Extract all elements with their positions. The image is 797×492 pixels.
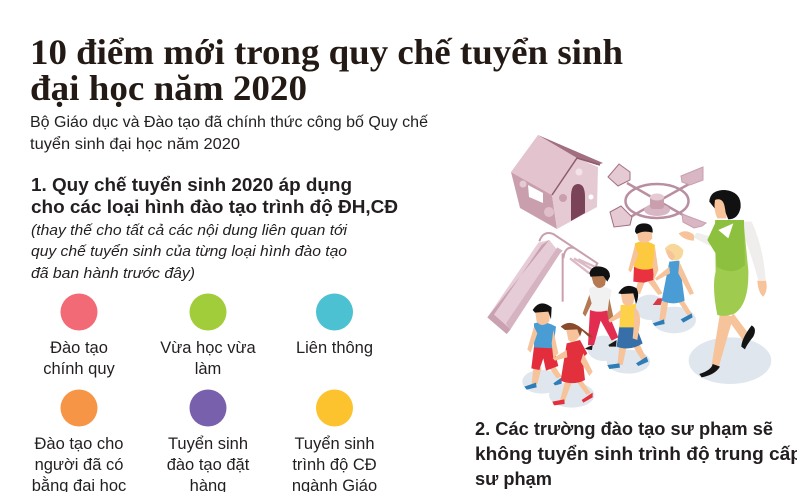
icon: carousel: [608, 164, 706, 228]
heading: point 2: không tuyển sinh trình độ trung cấp: [475, 444, 797, 464]
item: Tuyển sinh đào tạo đặt hàng: Tuyển sinh: [168, 435, 248, 453]
item: Đào tạo cho người đã có bằng đại học: Đào tạo cho: [35, 435, 123, 453]
illustration: child in yellow shirt, blue shorts: [607, 286, 650, 374]
item: Vừa học vừa làm: [160, 294, 257, 378]
item: Đào tạo cho người đã có bằng đại học: người đã có: [35, 456, 123, 474]
item: Vừa học vừa làm: Vừa học vừa: [160, 339, 257, 357]
heading: point 1: [31, 175, 398, 217]
title: [30, 32, 623, 108]
item: Liên thông: [296, 294, 373, 357]
item: Tuyển sinh trình độ CĐ ngành Giáo: trình độ CĐ: [292, 456, 377, 474]
illustration: child in white shirt, red trousers: [583, 266, 619, 361]
heading: point 2: sư phạm: [475, 469, 552, 489]
illustration: girl in red dress: [549, 323, 594, 408]
heading: point 2: [475, 419, 797, 489]
item: Vừa học vừa làm: làm: [195, 360, 221, 378]
subtitle: tuyển sinh đại học năm 2020: [30, 136, 240, 153]
item: Đào tạo cho người đã có bằng đại học: [32, 390, 126, 492]
item: Đào tạo chính quy: [43, 294, 116, 378]
title: 10 điểm mới trong quy chế tuyển sinh: [30, 32, 623, 72]
item: Tuyển sinh trình độ CĐ ngành Giáo: Tuyển sinh: [294, 435, 375, 453]
illustration: teacher head: [709, 190, 741, 219]
icon: slide: [487, 233, 597, 334]
heading: point 1: 1. Quy chế tuyển sinh 2020 áp dụng: [31, 175, 352, 195]
italic note: quy chế tuyển sinh của từng loại hình đào tạo: [31, 243, 347, 260]
illustration: child in yellow shirt, red shorts: [628, 223, 666, 320]
item: Tuyển sinh đào tạo đặt hàng: đào tạo đặt: [167, 456, 250, 474]
italic note: [31, 222, 348, 282]
item: Tuyển sinh trình độ CĐ ngành Giáo: [292, 390, 377, 492]
item: Đào tạo chính quy: chính quy: [43, 360, 116, 378]
illustration: child in blue dress: [652, 244, 696, 333]
item: Liên thông: Liên thông: [296, 339, 373, 357]
illustration: teacher: [679, 220, 771, 384]
icon: toy house: [511, 135, 603, 229]
title: đại học năm 2020: [30, 68, 307, 108]
item: Tuyển sinh đào tạo đặt hàng: [167, 390, 250, 492]
illustration: child in blue shirt, red shorts: [522, 303, 562, 394]
item: Đào tạo chính quy: Đào tạo: [50, 339, 108, 357]
italic note: (thay thế cho tất cả các nội dung liên quan tới: [31, 222, 348, 239]
subtitle: [30, 114, 428, 153]
heading: point 1: cho các loại hình đào tạo trình độ ĐH,CĐ: [31, 197, 398, 217]
subtitle: Bộ Giáo dục và Đào tạo đã chính thức công bố Quy chế: [30, 114, 428, 131]
italic note: đã ban hành trước đây): [31, 265, 195, 282]
heading: point 2: 2. Các trường đào tạo sư phạm sẽ: [475, 419, 773, 439]
